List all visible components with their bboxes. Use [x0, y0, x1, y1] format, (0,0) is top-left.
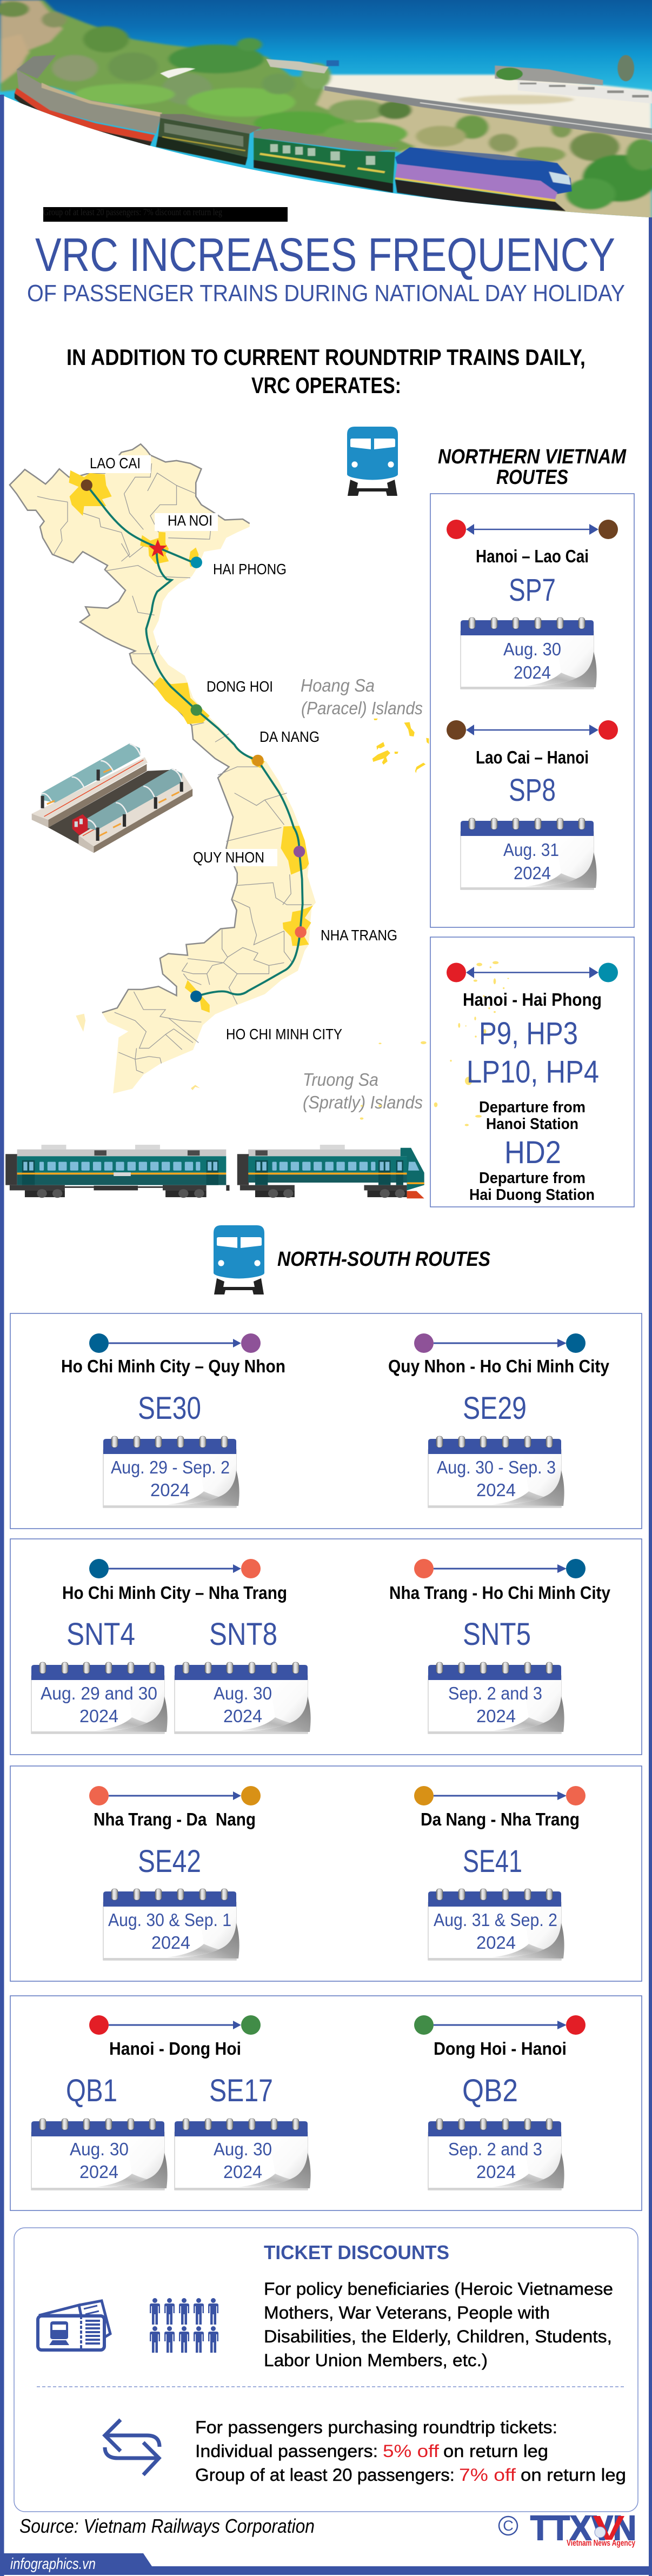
panel: ticket discounts	[14, 2228, 638, 2512]
calendar: Aug. 31 and Sep. 2: 2024	[476, 1933, 516, 1953]
calendar: Aug. 29 - Sep. 2	[103, 1436, 239, 1508]
train code SP8: SP8	[509, 773, 556, 808]
capital star: Hanoi	[148, 539, 167, 556]
train codes: QB2	[462, 2073, 518, 2108]
calendar: Aug. 30	[175, 1662, 311, 1734]
calendar: Sep. 2 and 3: 2024	[476, 1706, 516, 1726]
note: departure from Hai Duong Station: Departure from	[479, 1170, 586, 1187]
logo: TTXVN, Vietnam News Agency: TTXVN	[530, 2508, 636, 2547]
calendar: Aug. 29 and 30: 2024	[79, 1706, 118, 1726]
label: Ha Noi: HA NOI	[168, 512, 212, 529]
train codes: SE17	[209, 2073, 273, 2108]
panel: Hanoi - Lao Cai routes	[430, 494, 634, 927]
black redaction bar	[43, 207, 288, 222]
station: Lao Cai	[81, 480, 92, 491]
map of Vietnam with rail network	[10, 444, 429, 1093]
calendar: Aug. 30 and Sep. 1: Aug. 30 & Sep. 1	[108, 1910, 231, 1930]
calendar: Aug. 30 2024: 2024	[514, 662, 551, 682]
train codes: QB1	[66, 2073, 117, 2108]
calendar: Aug. 29 and 30: Aug. 29 and 30	[41, 1683, 157, 1703]
illustration: railway station	[32, 743, 192, 853]
train codes: SE30	[138, 1391, 201, 1426]
train codes: SNT8	[209, 1617, 277, 1652]
heading: north-south routes: NORTH-SOUTH ROUTES	[277, 1248, 490, 1271]
label: Hai Phong: HAI PHONG	[213, 561, 287, 577]
route names: Ho Chi Minh City – Nha Trang	[62, 1583, 287, 1603]
calendar: Aug. 30 - Sep. 3: 2024	[476, 1480, 516, 1500]
route name: Lao Cai – Hanoi	[476, 747, 589, 767]
route names: Nha Trang - Ho Chi Minh City	[389, 1583, 611, 1603]
route arrow: Lao Cai to Hanoi	[447, 720, 618, 740]
locomotive	[237, 1145, 424, 1198]
text: policy beneficiaries: For policy beneficiaries (Heroic Vietnamese	[264, 2279, 613, 2299]
panel: Nha Trang and Da Nang	[10, 1766, 642, 1981]
route names	[109, 2039, 567, 2059]
label: Truong Sa islands	[303, 1070, 423, 1112]
route names	[94, 1809, 580, 1829]
station: Ho Chi Minh City	[190, 991, 202, 1002]
intro heading	[66, 344, 586, 398]
calendar: Aug. 29 and 30	[31, 1662, 168, 1734]
left blue border	[0, 95, 4, 2576]
railway lines	[87, 485, 303, 997]
source line: Source: Vietnam Railways Corporation	[19, 2515, 315, 2537]
label: Truong Sa islands: Truong Sa	[303, 1070, 378, 1090]
route names: Da Nang - Nha Trang	[421, 1809, 580, 1829]
heading: northern Vietnam routes: NORTHERN VIETNAM	[438, 446, 627, 468]
icon: roundtrip arrows	[105, 2420, 159, 2475]
train codes: SNT5	[463, 1617, 531, 1652]
calendar: Aug. 31 and Sep. 2: Aug. 31 & Sep. 2	[434, 1910, 557, 1930]
text: roundtrip discounts: 5% off	[383, 2441, 439, 2461]
panel: Ho Chi Minh City and Quy Nhon	[10, 1313, 642, 1529]
right blue border	[649, 217, 652, 2576]
text: roundtrip discounts: on return leg	[521, 2465, 626, 2485]
label: Truong Sa islands: (Spratly) Islands	[303, 1092, 423, 1112]
train codes	[138, 1391, 527, 1426]
label: Nha Trang: NHA TRANG	[321, 927, 397, 944]
route arrow	[89, 1786, 586, 1805]
rail car	[5, 1145, 229, 1198]
calendar: Aug. 30 - Sep. 3: Aug. 30 - Sep. 3	[437, 1457, 556, 1477]
station: Nha Trang	[295, 926, 307, 938]
calendar: Aug. 29 - Sep. 2: Aug. 29 - Sep. 2	[111, 1457, 230, 1477]
train codes	[138, 1844, 522, 1879]
intro heading: VRC OPERATES:	[251, 373, 401, 398]
note: departure from Hai Duong Station	[469, 1170, 595, 1204]
train codes: SE41	[463, 1844, 522, 1879]
train codes: SE29	[463, 1391, 527, 1426]
calendar: Sep. 2 and 3	[428, 2119, 564, 2190]
label: Ha Noi	[155, 512, 218, 531]
text: roundtrip discounts: Group of at least 20 passengers:	[195, 2465, 455, 2485]
text: policy beneficiaries: Labor Union Members, etc.)	[264, 2351, 488, 2370]
calendar: Aug. 30 (SE17)	[175, 2119, 311, 2190]
note: departure from Hai Duong Station: Hai Duong Station	[469, 1186, 595, 1204]
route arrow: Hanoi to Hai Phong	[447, 962, 618, 982]
label: Ho Chi Minh City: HO CHI MINH CITY	[226, 1026, 342, 1043]
calendar: Aug. 31 and Sep. 2	[428, 1889, 564, 1960]
calendar: Sep. 2 and 3: Sep. 2 and 3	[448, 1683, 542, 1703]
calendar: Aug. 30: Aug. 30	[214, 1683, 272, 1703]
station: Quy Nhon	[294, 846, 305, 858]
route names: Quy Nhon - Ho Chi Minh City	[388, 1356, 610, 1376]
calendar: Sep. 2 and 3	[428, 1662, 564, 1734]
label: Lao Cai: LAO CAI	[90, 455, 141, 472]
country shape	[10, 444, 316, 1093]
route names: Hanoi - Dong Hoi	[109, 2039, 241, 2059]
panel: Hanoi - Hai Phong routes	[430, 937, 634, 1207]
intro heading: IN ADDITION TO CURRENT ROUNDTRIP TRAINS DAILY,	[66, 344, 586, 370]
route arrow	[89, 1333, 586, 1353]
route arrow	[89, 1559, 586, 1578]
route name: Hanoi - Hai Phong	[463, 990, 602, 1010]
train codes: P9, HP3	[479, 1016, 578, 1051]
note: departure from Hanoi Station	[479, 1099, 586, 1133]
panel: Ho Chi Minh City and Nha Trang	[10, 1539, 642, 1755]
city labels	[80, 455, 397, 1043]
train codes	[66, 1617, 531, 1652]
header photo: train along the coast	[0, 0, 652, 220]
route name: Hanoi – Lao Cai	[476, 546, 589, 566]
route names: Nha Trang - Da Nang	[94, 1809, 256, 1829]
heading: ticket discounts: TICKET DISCOUNTS	[264, 2241, 449, 2263]
text: roundtrip discounts: 7% off	[459, 2465, 516, 2485]
route arrow	[89, 2015, 586, 2035]
calendar: Aug. 29 - Sep. 2: 2024	[150, 1480, 190, 1500]
icon: group of people	[150, 2298, 218, 2353]
label: Hoang Sa islands: (Paracel) Islands	[301, 698, 423, 718]
heading: northern Vietnam routes	[438, 446, 627, 489]
train codes	[467, 1016, 599, 1090]
label: Da Nang: DA NANG	[260, 728, 320, 745]
label: Dong Hoi: DONG HOI	[207, 678, 273, 695]
calendar: Aug. 31 2024	[461, 818, 597, 889]
route arrow: Hanoi to Lao Cai	[447, 520, 618, 539]
calendar: Sep. 2 and 3: Sep. 2 and 3	[448, 2139, 542, 2159]
calendar: Aug. 30 (SE17): Aug. 30	[214, 2139, 272, 2159]
text: policy beneficiaries: Disabilities, the Elderly, Children, Students,	[264, 2327, 612, 2346]
station: Da Nang	[252, 755, 264, 766]
text: roundtrip discounts	[195, 2418, 626, 2485]
calendar: Aug. 31 2024: Aug. 31	[503, 840, 559, 860]
calendar: Aug. 30 and Sep. 1: 2024	[151, 1933, 190, 1953]
text: policy beneficiaries: Mothers, War Veterans, People with	[264, 2303, 550, 2322]
calendar: Aug. 30 (QB1)	[31, 2119, 168, 2190]
panel: Hanoi and Dong Hoi	[10, 1996, 642, 2210]
islands	[76, 719, 429, 1090]
calendar: Aug. 30 and Sep. 1	[103, 1889, 239, 1960]
calendar: Aug. 30 (QB1): Aug. 30	[70, 2139, 129, 2159]
calendar: Aug. 30 2024	[461, 618, 597, 689]
illustration: passenger train	[5, 1145, 424, 1198]
note: departure from Hanoi Station: Departure from	[479, 1099, 586, 1116]
calendar: Aug. 30 2024: Aug. 30	[503, 639, 561, 659]
train codes: LP10, HP4	[467, 1054, 599, 1090]
label: Quy Nhon: QUY NHON	[193, 849, 264, 866]
black redaction bar: Group of at least 20 passengers: 7% discount on return leg	[43, 207, 222, 217]
calendar: Aug. 30 (QB1): 2024	[79, 2162, 118, 2182]
copyright mark	[499, 2517, 517, 2535]
footer band with website tab	[0, 2553, 652, 2575]
route names: Dong Hoi - Hanoi	[434, 2039, 567, 2059]
calendar: Aug. 30 - Sep. 3	[428, 1436, 564, 1508]
note: departure from Hanoi Station: Hanoi Station	[486, 1116, 578, 1133]
label: Hoang Sa islands: Hoang Sa	[301, 675, 375, 695]
text: roundtrip discounts: For passengers purchasing roundtrip tickets:	[195, 2418, 557, 2437]
heading: northern Vietnam routes: ROUTES	[496, 466, 568, 489]
route names	[62, 1583, 611, 1603]
icon: train, north-south routes	[214, 1225, 264, 1294]
route names: Ho Chi Minh City – Quy Nhon	[61, 1356, 285, 1376]
calendar: Aug. 31 2024: 2024	[514, 863, 551, 883]
Truong Sa island specks	[360, 961, 509, 1126]
text: roundtrip discounts: on return leg	[443, 2441, 548, 2461]
train code SP7: SP7	[509, 573, 556, 608]
text: policy beneficiaries	[264, 2279, 613, 2370]
calendar: Aug. 30: 2024	[223, 1706, 262, 1726]
label: Hoang Sa islands	[301, 675, 423, 718]
train codes	[66, 2073, 518, 2108]
train code HD2: HD2	[504, 1135, 561, 1170]
station: Hai Phong	[191, 556, 202, 568]
icon: train, northern routes	[347, 427, 398, 496]
copyright mark: C	[503, 2518, 514, 2534]
calendar: Aug. 30 (SE17): 2024	[223, 2162, 262, 2182]
website label: infographics.vn	[10, 2555, 96, 2573]
train codes: SE42	[138, 1844, 201, 1879]
calendar: Sep. 2 and 3: 2024	[476, 2162, 516, 2182]
text: roundtrip discounts: Individual passengers:	[195, 2441, 378, 2461]
highlighted provinces	[69, 470, 313, 1013]
train codes: SNT4	[66, 1617, 135, 1652]
icon: train ticket	[38, 2301, 110, 2350]
route names	[61, 1356, 610, 1376]
station: Dong Hoi	[191, 704, 202, 716]
